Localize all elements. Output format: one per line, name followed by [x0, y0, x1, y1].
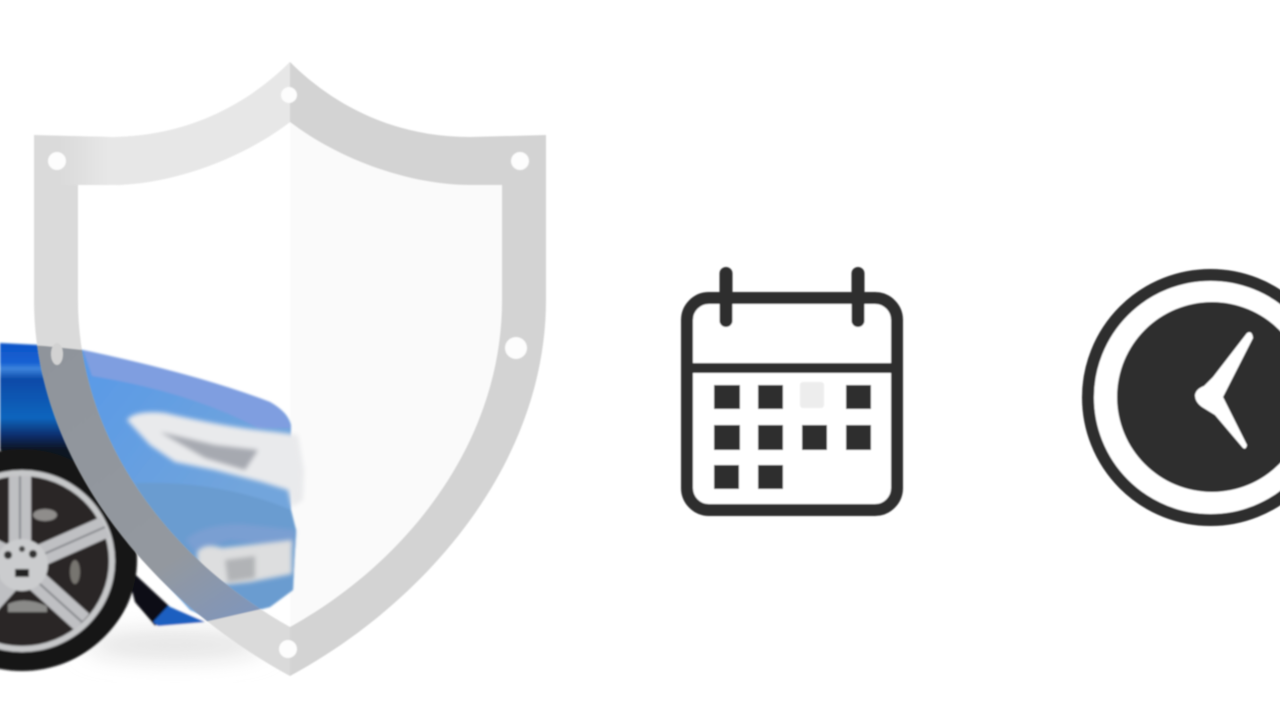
fog lights — [197, 540, 292, 586]
left rivet over car — [51, 343, 63, 365]
hub — [0, 539, 48, 591]
shield — [34, 62, 546, 676]
calendar binder rings — [720, 267, 864, 327]
shield interior right half — [290, 122, 502, 627]
shield right half band — [290, 62, 546, 676]
tyre — [0, 449, 137, 671]
shield rivets — [48, 87, 529, 658]
calendar day squares — [714, 382, 871, 489]
hood upper band — [83, 350, 291, 428]
car hood and front — [70, 350, 296, 621]
icon: clock — [1088, 275, 1280, 520]
grille recess — [186, 524, 295, 552]
clock hands — [1195, 332, 1253, 449]
shield interior — [290, 122, 502, 627]
spokes — [0, 476, 105, 625]
car illustration — [0, 343, 304, 671]
calendar frame — [687, 298, 897, 510]
car body rear section — [0, 343, 110, 480]
lower bumper shade — [135, 483, 296, 621]
car lower sill — [125, 565, 170, 626]
shield left half band — [34, 62, 290, 676]
ground shadow — [85, 631, 265, 659]
rim — [0, 470, 115, 652]
brake detail — [33, 509, 57, 521]
icon: calendar — [687, 267, 897, 510]
wheel — [0, 449, 137, 671]
headlight shading — [160, 432, 258, 470]
clock outer ring — [1088, 275, 1280, 520]
shield band over car — [36, 345, 260, 622]
clock face — [1117, 302, 1280, 492]
headlight — [127, 412, 304, 507]
shield top-left arc highlight — [60, 62, 290, 185]
calendar header divider — [687, 363, 897, 373]
